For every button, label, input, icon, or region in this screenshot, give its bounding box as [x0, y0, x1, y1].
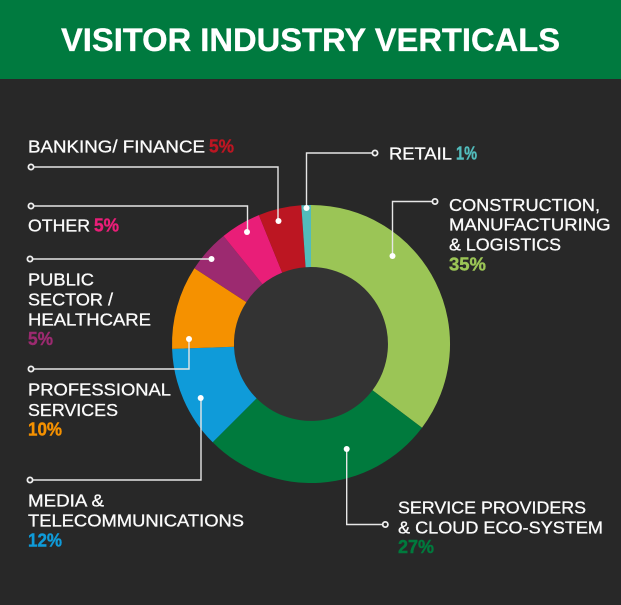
- label: construction, manufacturing and logistics: 35%: [449, 255, 486, 275]
- connector: construction: [390, 199, 438, 259]
- label: construction, manufacturing and logistics: & LOGISTICS: [449, 235, 561, 255]
- label: other: 5%: [94, 216, 119, 236]
- connector: public sector: [27, 256, 215, 262]
- label: public sector / healthcare: PUBLIC: [28, 270, 94, 290]
- segment: public sector 5%: [194, 236, 262, 302]
- label: professional services: PROFESSIONAL: [28, 380, 171, 400]
- connector: banking: [28, 164, 282, 224]
- label: professional services: SERVICES: [28, 400, 118, 420]
- connector: service providers: [344, 446, 388, 527]
- label: public sector / healthcare: HEALTHCARE: [28, 309, 151, 329]
- label: retail: [389, 143, 477, 163]
- segment: other 5%: [224, 215, 282, 284]
- label: public sector / healthcare: SECTOR /: [28, 290, 113, 310]
- connector: retail: [304, 150, 378, 211]
- label: other: OTHER: [28, 216, 90, 236]
- label: service providers and cloud eco-system: & CLOUD ECO-SYSTEM: [398, 517, 603, 537]
- label: banking / finance: BANKING/ FINANCE: [28, 137, 205, 157]
- donut chart: [172, 205, 450, 483]
- segment: service providers 27%: [213, 390, 422, 483]
- label: retail: 1%: [456, 143, 477, 163]
- label: service providers and cloud eco-system: 27%: [398, 537, 434, 557]
- label: construction, manufacturing and logistics: CONSTRUCTION,: [449, 195, 600, 215]
- donut centre: [233, 266, 389, 422]
- segment: professional services 10%: [172, 268, 246, 349]
- segment: media 12%: [172, 347, 257, 442]
- label: media and telecommunications: [28, 491, 244, 551]
- label: professional services: [28, 380, 171, 440]
- label: media and telecommunications: TELECOMMUNICATIONS: [28, 511, 244, 531]
- connector: other: [28, 203, 250, 235]
- segment: construction 35%: [311, 205, 450, 428]
- header banner: [0, 0, 621, 79]
- label: professional services: 10%: [28, 420, 62, 440]
- label: media and telecommunications: 12%: [28, 531, 62, 551]
- label: service providers and cloud eco-system: [398, 497, 603, 557]
- label: retail: RETAIL: [389, 143, 452, 163]
- connector: professional services: [28, 336, 192, 372]
- label: service providers and cloud eco-system: SERVICE PROVIDERS: [398, 497, 586, 517]
- label: media and telecommunications: MEDIA &: [28, 491, 104, 511]
- label: public sector / healthcare: [28, 270, 151, 349]
- segment: retail 1%: [301, 205, 311, 267]
- segment: banking 5%: [259, 205, 306, 273]
- label: construction, manufacturing and logistics: [449, 195, 610, 275]
- title: VISITOR INDUSTRY VERTICALS: [61, 22, 560, 58]
- label: construction, manufacturing and logistics: MANUFACTURING: [449, 215, 610, 235]
- label: banking / finance: 5%: [209, 137, 234, 157]
- label: public sector / healthcare: 5%: [28, 329, 53, 349]
- connector: media: [27, 395, 204, 483]
- label: other: [28, 216, 119, 236]
